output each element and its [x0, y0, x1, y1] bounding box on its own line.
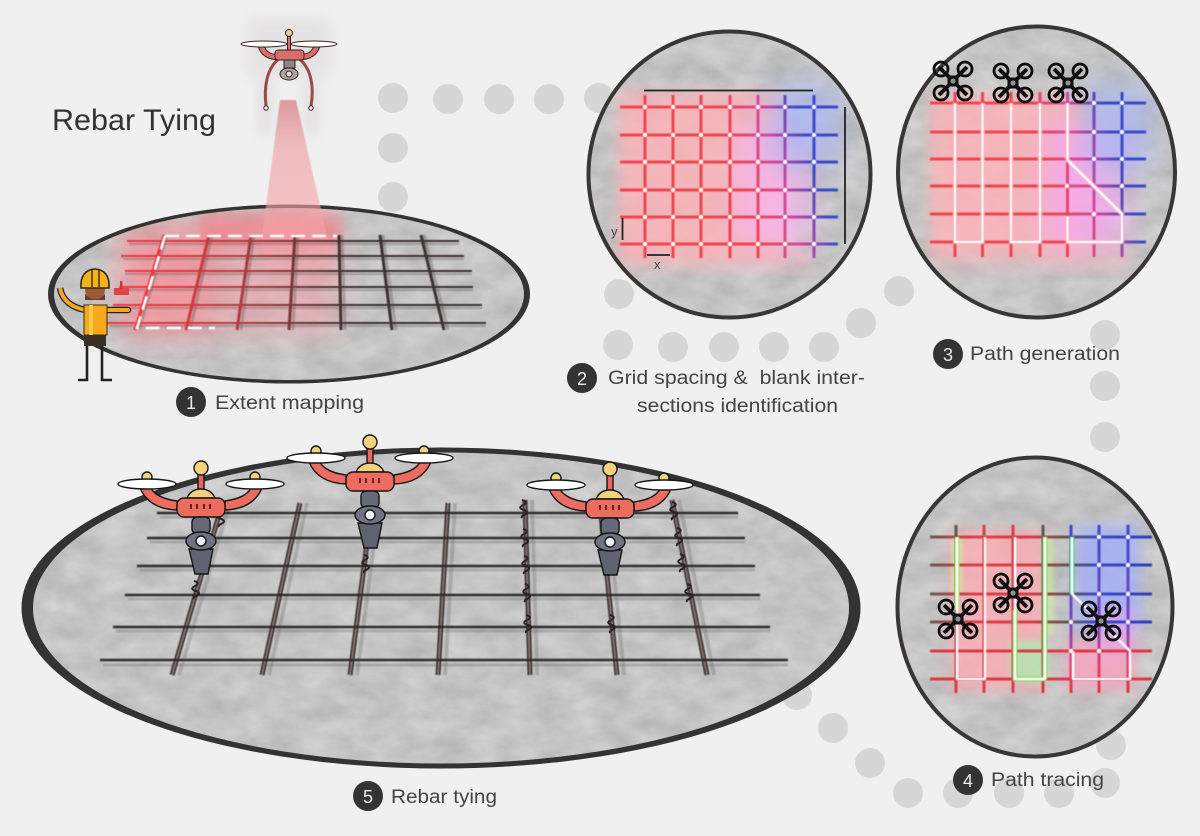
step 1 label: [176, 387, 364, 417]
title: Rebar Tying: [52, 104, 216, 137]
traced coloured paths: [957, 537, 1130, 679]
disc 2 rim: [588, 32, 870, 318]
concrete disc 2: [589, 32, 870, 317]
quadcopter icons 4: [939, 574, 1120, 640]
generated white paths: [955, 103, 1122, 242]
step 2 label: sections identification: [637, 396, 838, 417]
step 3 label: Path generation: [970, 344, 1120, 365]
concrete disc 1: [48, 204, 530, 384]
concrete disc 4: [898, 458, 1172, 756]
rebar grid 3: [930, 92, 1146, 257]
panel: grid spacing: [567, 32, 870, 417]
quadcopter icons 3: [934, 62, 1087, 102]
red and blue glow 3: [930, 85, 1150, 270]
concrete disc 5: [22, 448, 860, 768]
step 3 label: 3: [943, 345, 953, 365]
blank intersections 3: [1065, 101, 1124, 216]
panel: path tracing: [898, 458, 1172, 795]
motion blur streaks: [248, 18, 330, 135]
tying drone left: [118, 461, 284, 574]
blank intersections 4: [1069, 535, 1130, 653]
step 3 label: [933, 339, 1120, 369]
step 5 label: [353, 781, 497, 811]
blank intersections 2: [643, 105, 816, 246]
step 5 label: Rebar tying: [391, 787, 497, 808]
step 2 label: 2: [577, 369, 587, 389]
disc 4 rim: [898, 458, 1172, 756]
step 1 label: Extent mapping: [215, 393, 364, 414]
panel: extent mapping: [48, 18, 530, 417]
rebar grid 1: [107, 235, 486, 330]
dimension lines: x: [654, 257, 661, 272]
coloured glow 4: [950, 525, 1140, 690]
tie knots: [192, 500, 692, 633]
panel: path generation: [898, 26, 1175, 369]
scanning drone: [241, 30, 337, 110]
step 5 label: 5: [363, 787, 373, 807]
rebar grid 2: [620, 95, 838, 258]
concrete disc 3: [898, 27, 1174, 317]
tying drone centre: [287, 435, 453, 548]
rebar grid 5: [100, 500, 788, 675]
worker with controller: [60, 269, 129, 380]
step 4 label: Path tracing: [991, 770, 1104, 791]
red and blue glow 2: [618, 85, 840, 270]
laser beam: [262, 100, 340, 284]
dashed extent outline: [137, 236, 337, 328]
step 2 label: [567, 363, 865, 417]
red scan glow: [120, 212, 340, 334]
dotted process path: [378, 83, 1126, 808]
dimension lines: [611, 90, 845, 272]
rebar grid 4: [930, 525, 1152, 693]
step 1 label: 1: [186, 393, 196, 413]
step 2 label: Grid spacing & blank inter-: [608, 368, 865, 389]
step 4 label: [953, 765, 1104, 795]
tying drone right: [527, 462, 693, 575]
step 4 label: 4: [963, 771, 973, 791]
dimension lines: y: [611, 224, 618, 239]
panel: rebar tying: [22, 435, 860, 811]
disc 3 rim: [898, 26, 1175, 318]
